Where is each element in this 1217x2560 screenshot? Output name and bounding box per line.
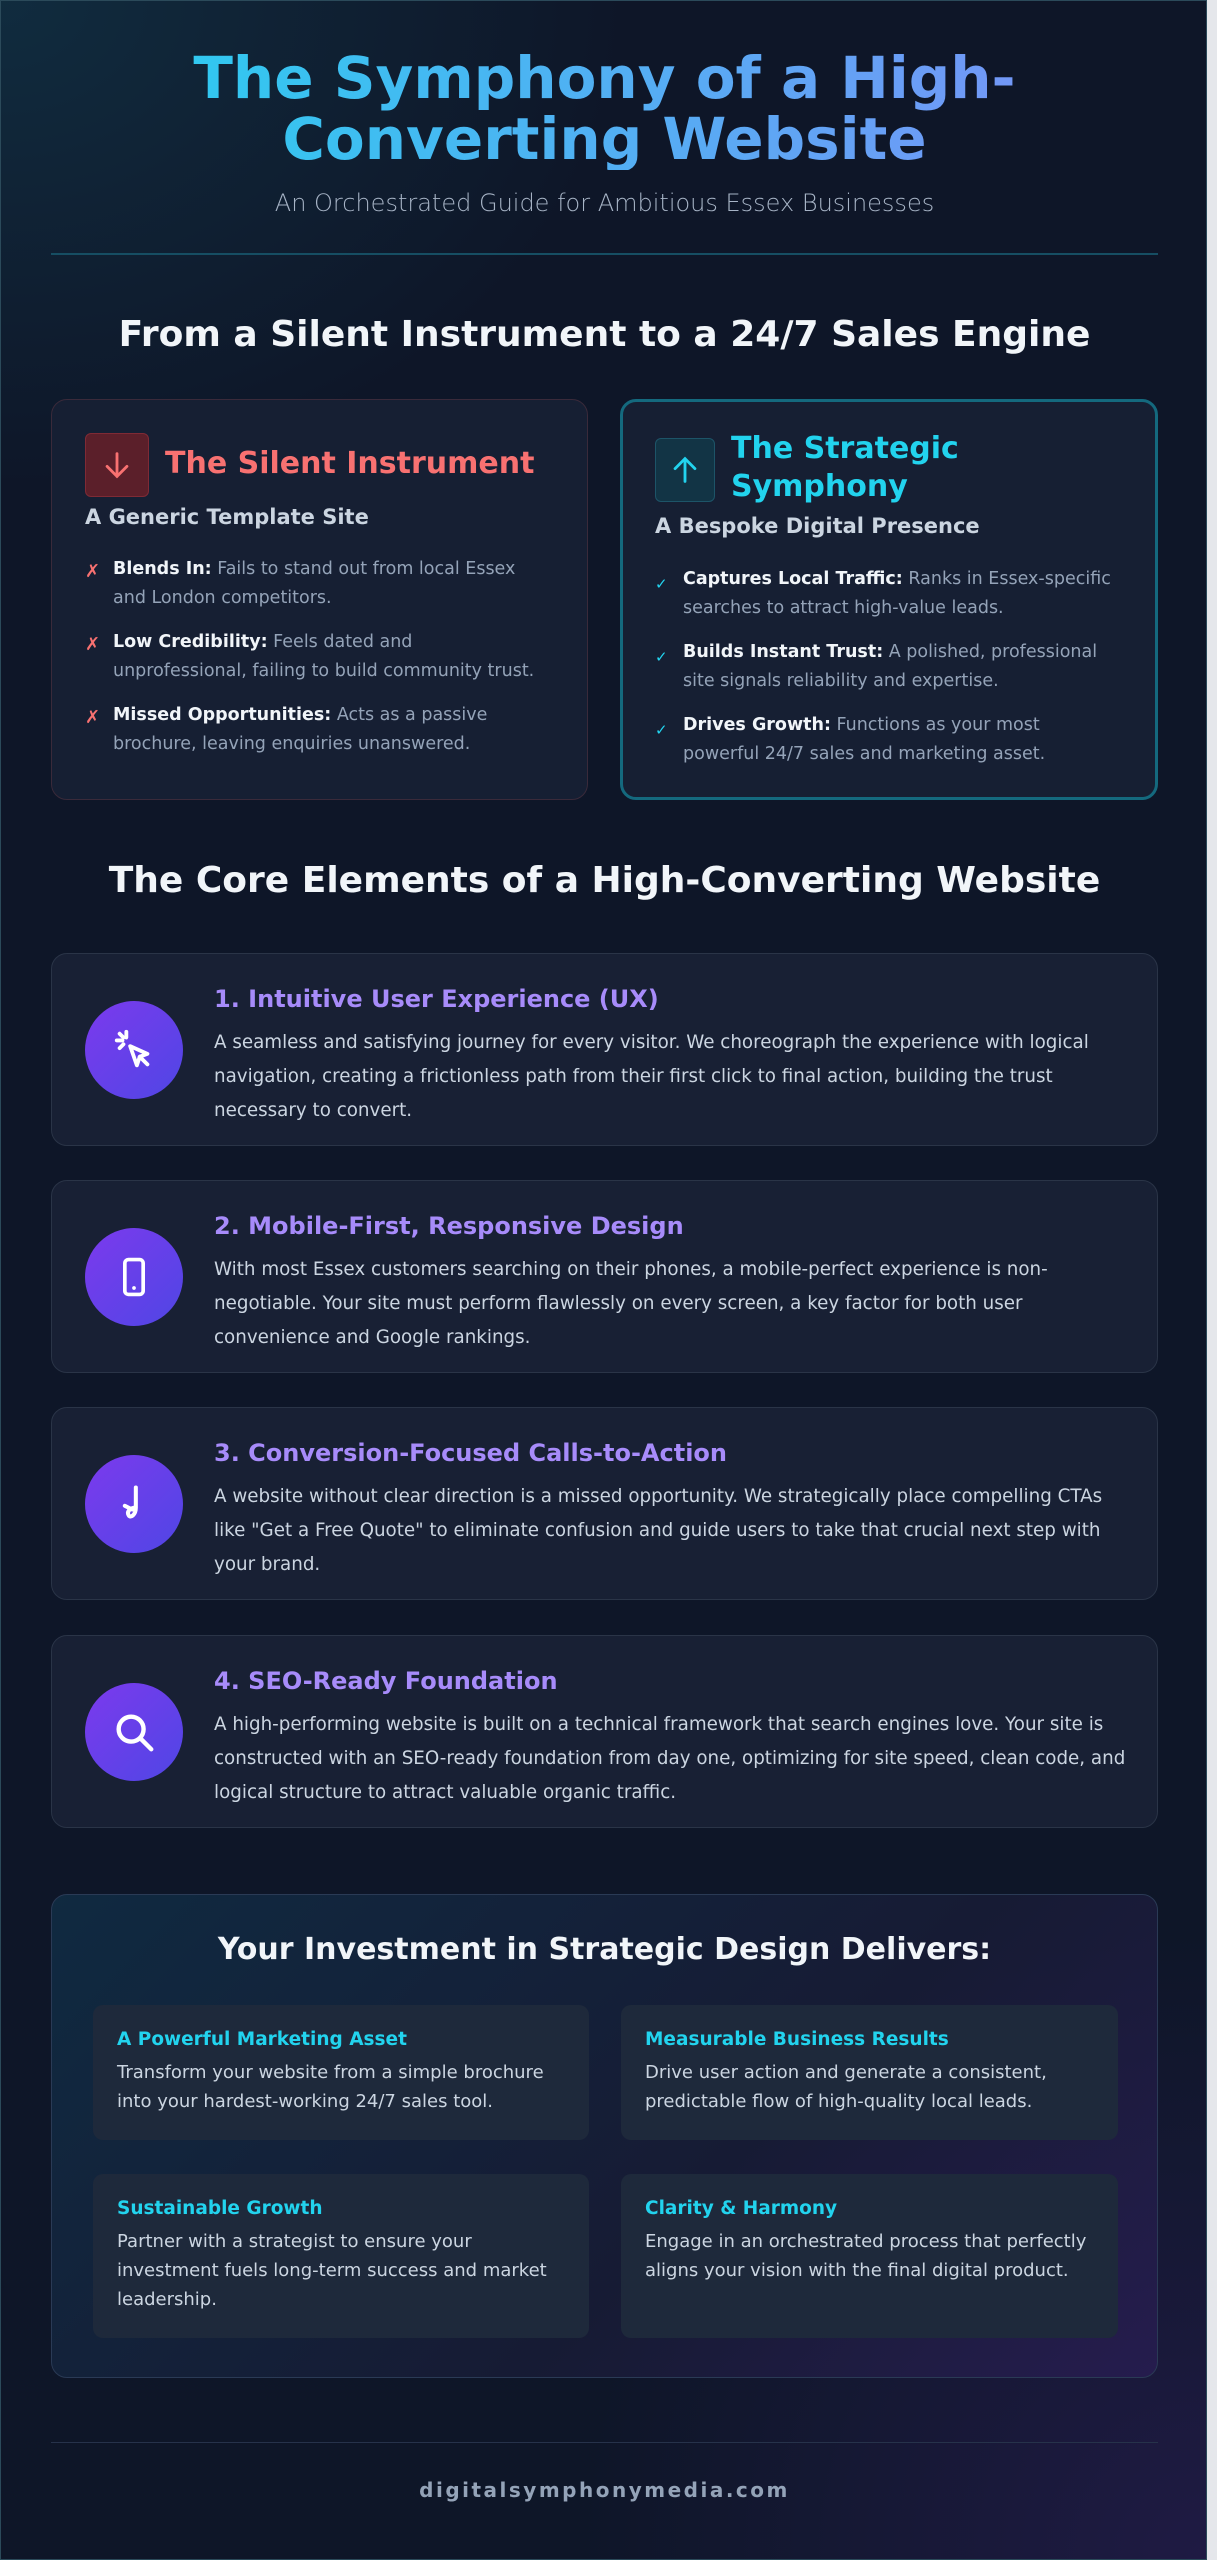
list: drawbacks: ✗ [85,561,100,582]
benefit: sustainable growth [93,2174,589,2338]
title: 1. Intuitive User Experience (UX) [214,985,659,1013]
heading: Your Investment in Strategic Design Delivers: [218,1932,991,1967]
list: drawbacks: Blends In: Fails to stand out from local Essex and London competitors. [113,559,515,608]
list: drawbacks: ✗ [85,634,100,655]
benefit: marketing asset: Transform your website from a simple brochure into your hardest-working 24/7 sales tool. [117,2062,544,2112]
section heading: core elements: The Core Elements of a High-Converting Website [109,860,1100,901]
list: drawbacks: Low Credibility: Feels dated and unprofessional, failing to build community trust. [113,632,534,681]
heading [731,431,959,504]
list: benefits: Drives Growth: Functions as your most [683,715,1040,735]
feature card 1 [51,953,1158,1146]
benefit: clarity [621,2174,1118,2338]
benefit: measurable results: Drive user action and generate a consistent, predictable flow of high-quality local leads. [645,2062,1047,2112]
description: A website without clear direction is a missed opportunity. We strategically place compelling CTAs like "Get a Free Quote" to eliminate confusion and guide users to take that crucial next step with your brand. [214,1486,1102,1575]
benefit: sustainable growth: Partner with a strategist to ensure your investment fuels long-term success and market leadership. [117,2231,547,2310]
heading: Symphony [731,469,908,504]
icon: cursor click [85,1001,183,1099]
panel: strategic symphony [620,399,1158,800]
title: 4. SEO-Ready Foundation [214,1667,558,1695]
feature card 2 [51,1180,1158,1373]
subtitle: An Orchestrated Guide for Ambitious Essex Businesses [275,189,934,217]
list: benefits [655,569,1111,764]
benefit: sustainable growth: Sustainable Growth [117,2198,323,2219]
description: A high-performing website is built on a technical framework that search engines love. Your site is constructed with an SEO-ready foundation from day one, optimizing for site speed, clean code, and logical structure to attract valuable organic traffic. [214,1714,1125,1803]
heading: The Strategic [731,431,959,466]
benefit: measurable results: Measurable Business Results [645,2029,949,2050]
list: benefits: ✓ [655,575,668,593]
subheading: A Bespoke Digital Presence [655,514,980,538]
panel: silent instrument [51,399,588,800]
description: With most Essex customers searching on their phones, a mobile-perfect experience is non-negotiable. Your site must perform flawlessly on every screen, a key factor for both user convenience and Google rankings. [214,1259,1048,1348]
heading: The Silent Instrument [165,446,534,481]
icon: pointer [85,1455,183,1553]
list: benefits: Builds Instant Trust: A polished, professional site signals reliability and expertise. [683,642,1097,691]
panel: investment [51,1894,1158,2378]
title: 2. Mobile-First, Responsive Design [214,1212,684,1240]
list: drawbacks [85,559,534,754]
feature card 3 [51,1407,1158,1600]
subheading: A Generic Template Site [85,505,369,529]
icon: mobile [85,1228,183,1326]
list: benefits: ✓ [655,721,668,739]
list: drawbacks: ✗ [85,707,100,728]
description: A seamless and satisfying journey for every visitor. We choreograph the experience with logical navigation, creating a frictionless path from their first click to final action, building the trust necessary to convert. [214,1032,1089,1121]
benefit: clarity: Clarity & Harmony [645,2198,837,2219]
list: benefits: Captures Local Traffic: Ranks in Essex-specific searches to attract high-value leads. [683,569,1111,618]
section heading: comparison: From a Silent Instrument to a 24/7 Sales Engine [119,314,1090,355]
benefit: marketing asset: A Powerful Marketing Asset [117,2029,407,2050]
benefit: marketing asset [93,2005,589,2140]
title: Converting Website [282,105,927,173]
feature card 4 [51,1635,1158,1828]
icon: search [85,1683,183,1781]
list: benefits: powerful 24/7 sales and marketing asset. [683,744,1045,764]
list: drawbacks: Missed Opportunities: Acts as a passive brochure, leaving enquiries unanswered. [113,705,487,754]
title: The Symphony of a High- [193,44,1016,112]
list: benefits: ✓ [655,648,668,666]
title [1,48,1208,170]
icon: down arrow [85,433,149,497]
title: 3. Conversion-Focused Calls-to-Action [214,1439,727,1467]
benefit: clarity: Engage in an orchestrated process that perfectly aligns your vision with the final digital product. [645,2231,1086,2281]
icon: up arrow [655,438,715,502]
benefit: measurable results [621,2005,1118,2140]
footer: digitalsymphonymedia.com [419,2478,790,2502]
